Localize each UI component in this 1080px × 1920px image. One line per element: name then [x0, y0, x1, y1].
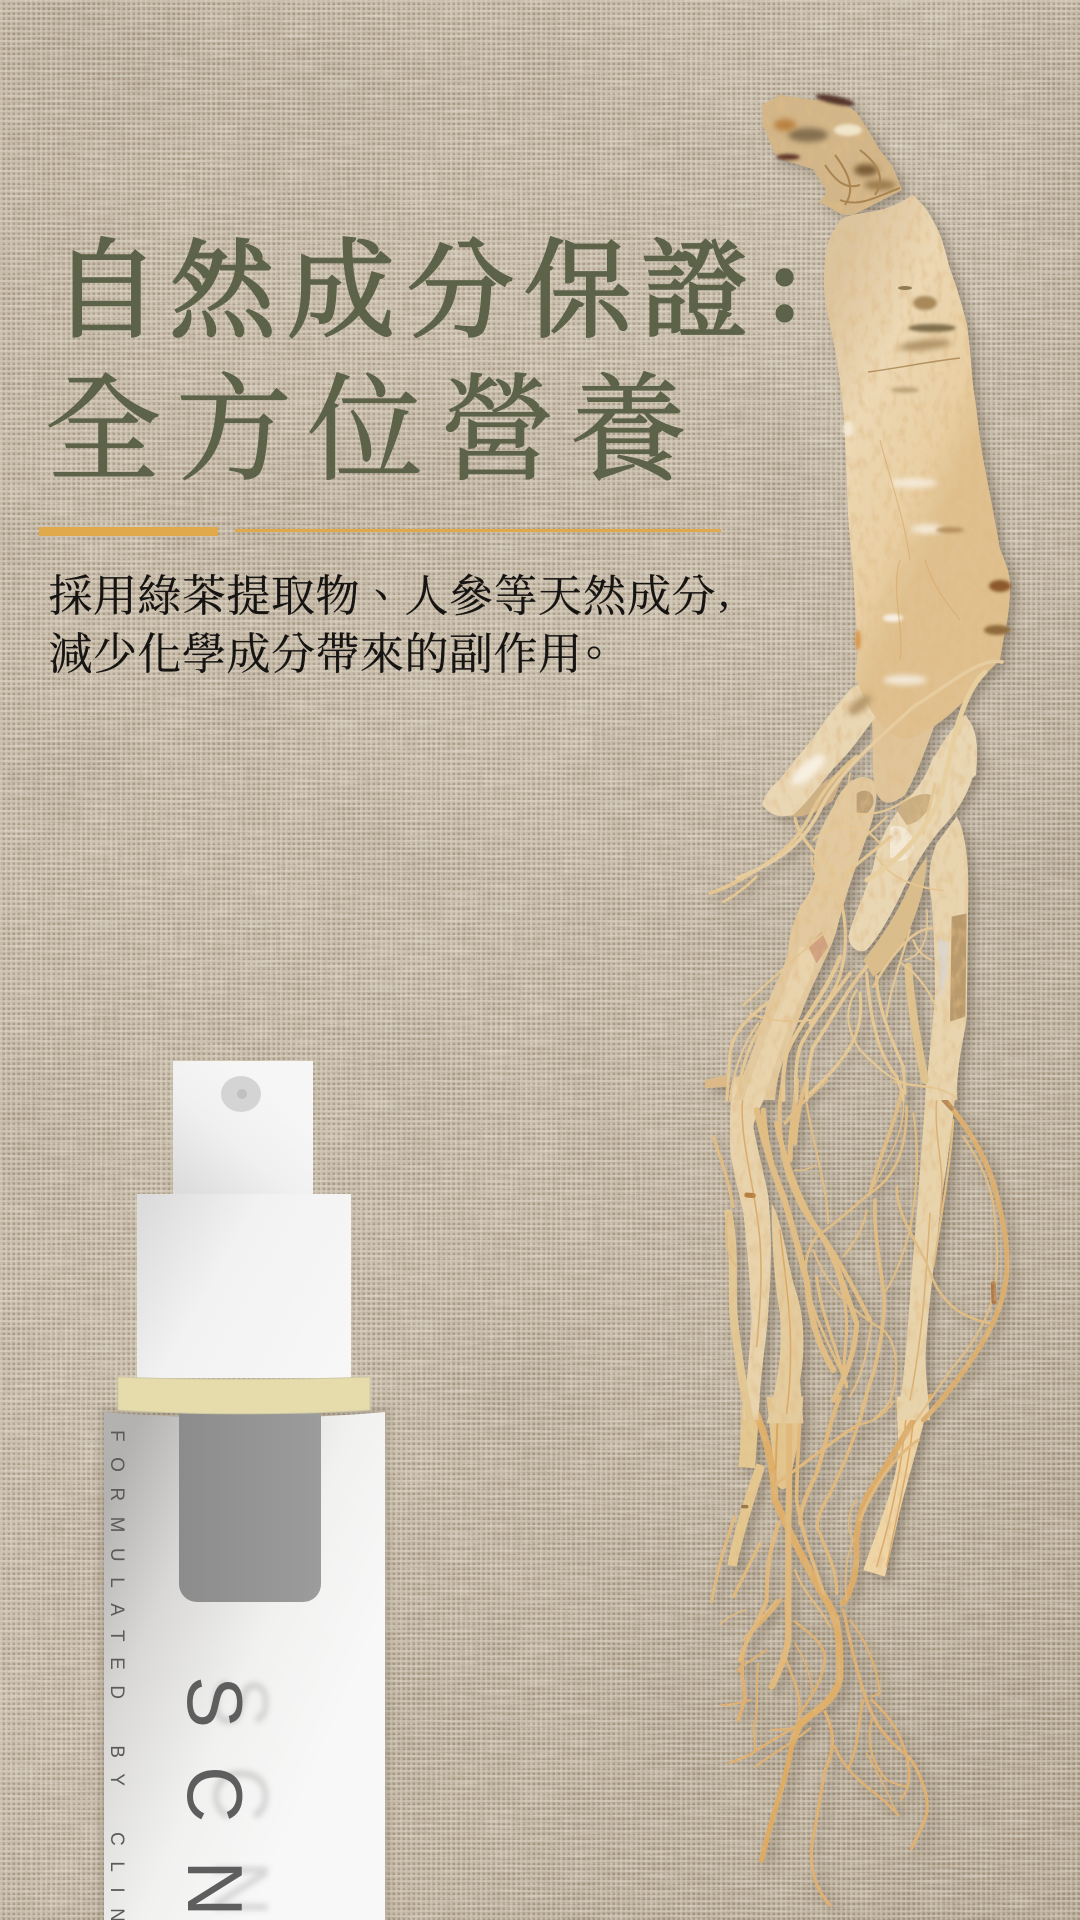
lowest fine rootlets — [722, 1600, 927, 1905]
upper root section — [705, 757, 976, 1100]
lower root legs and strands — [712, 1397, 930, 1740]
bottle body — [104, 1412, 385, 1920]
body text line 1: 採用綠茶提取物、人參等天然成分 — [48, 572, 716, 621]
soft shadow behind bottle — [100, 1408, 388, 1918]
body comma: , — [718, 567, 730, 616]
title colon: : — [766, 222, 804, 346]
arm highlight — [786, 749, 830, 791]
main root body — [824, 195, 1010, 740]
collar ring — [118, 1377, 370, 1414]
pump head — [173, 1061, 313, 1195]
middle root section — [713, 1077, 1007, 1423]
viewing window — [179, 1410, 321, 1602]
bottle cap — [137, 1194, 351, 1378]
rhizome head — [762, 92, 902, 215]
body text line 2: 減少化學成分帶來的副作用。 — [48, 630, 616, 679]
root surface marks — [843, 286, 1011, 719]
title line 1: 自然成分保證 — [52, 233, 749, 352]
title line 2: 全方位營養 — [45, 368, 686, 496]
root sections with fibrous texture — [705, 195, 1010, 1905]
